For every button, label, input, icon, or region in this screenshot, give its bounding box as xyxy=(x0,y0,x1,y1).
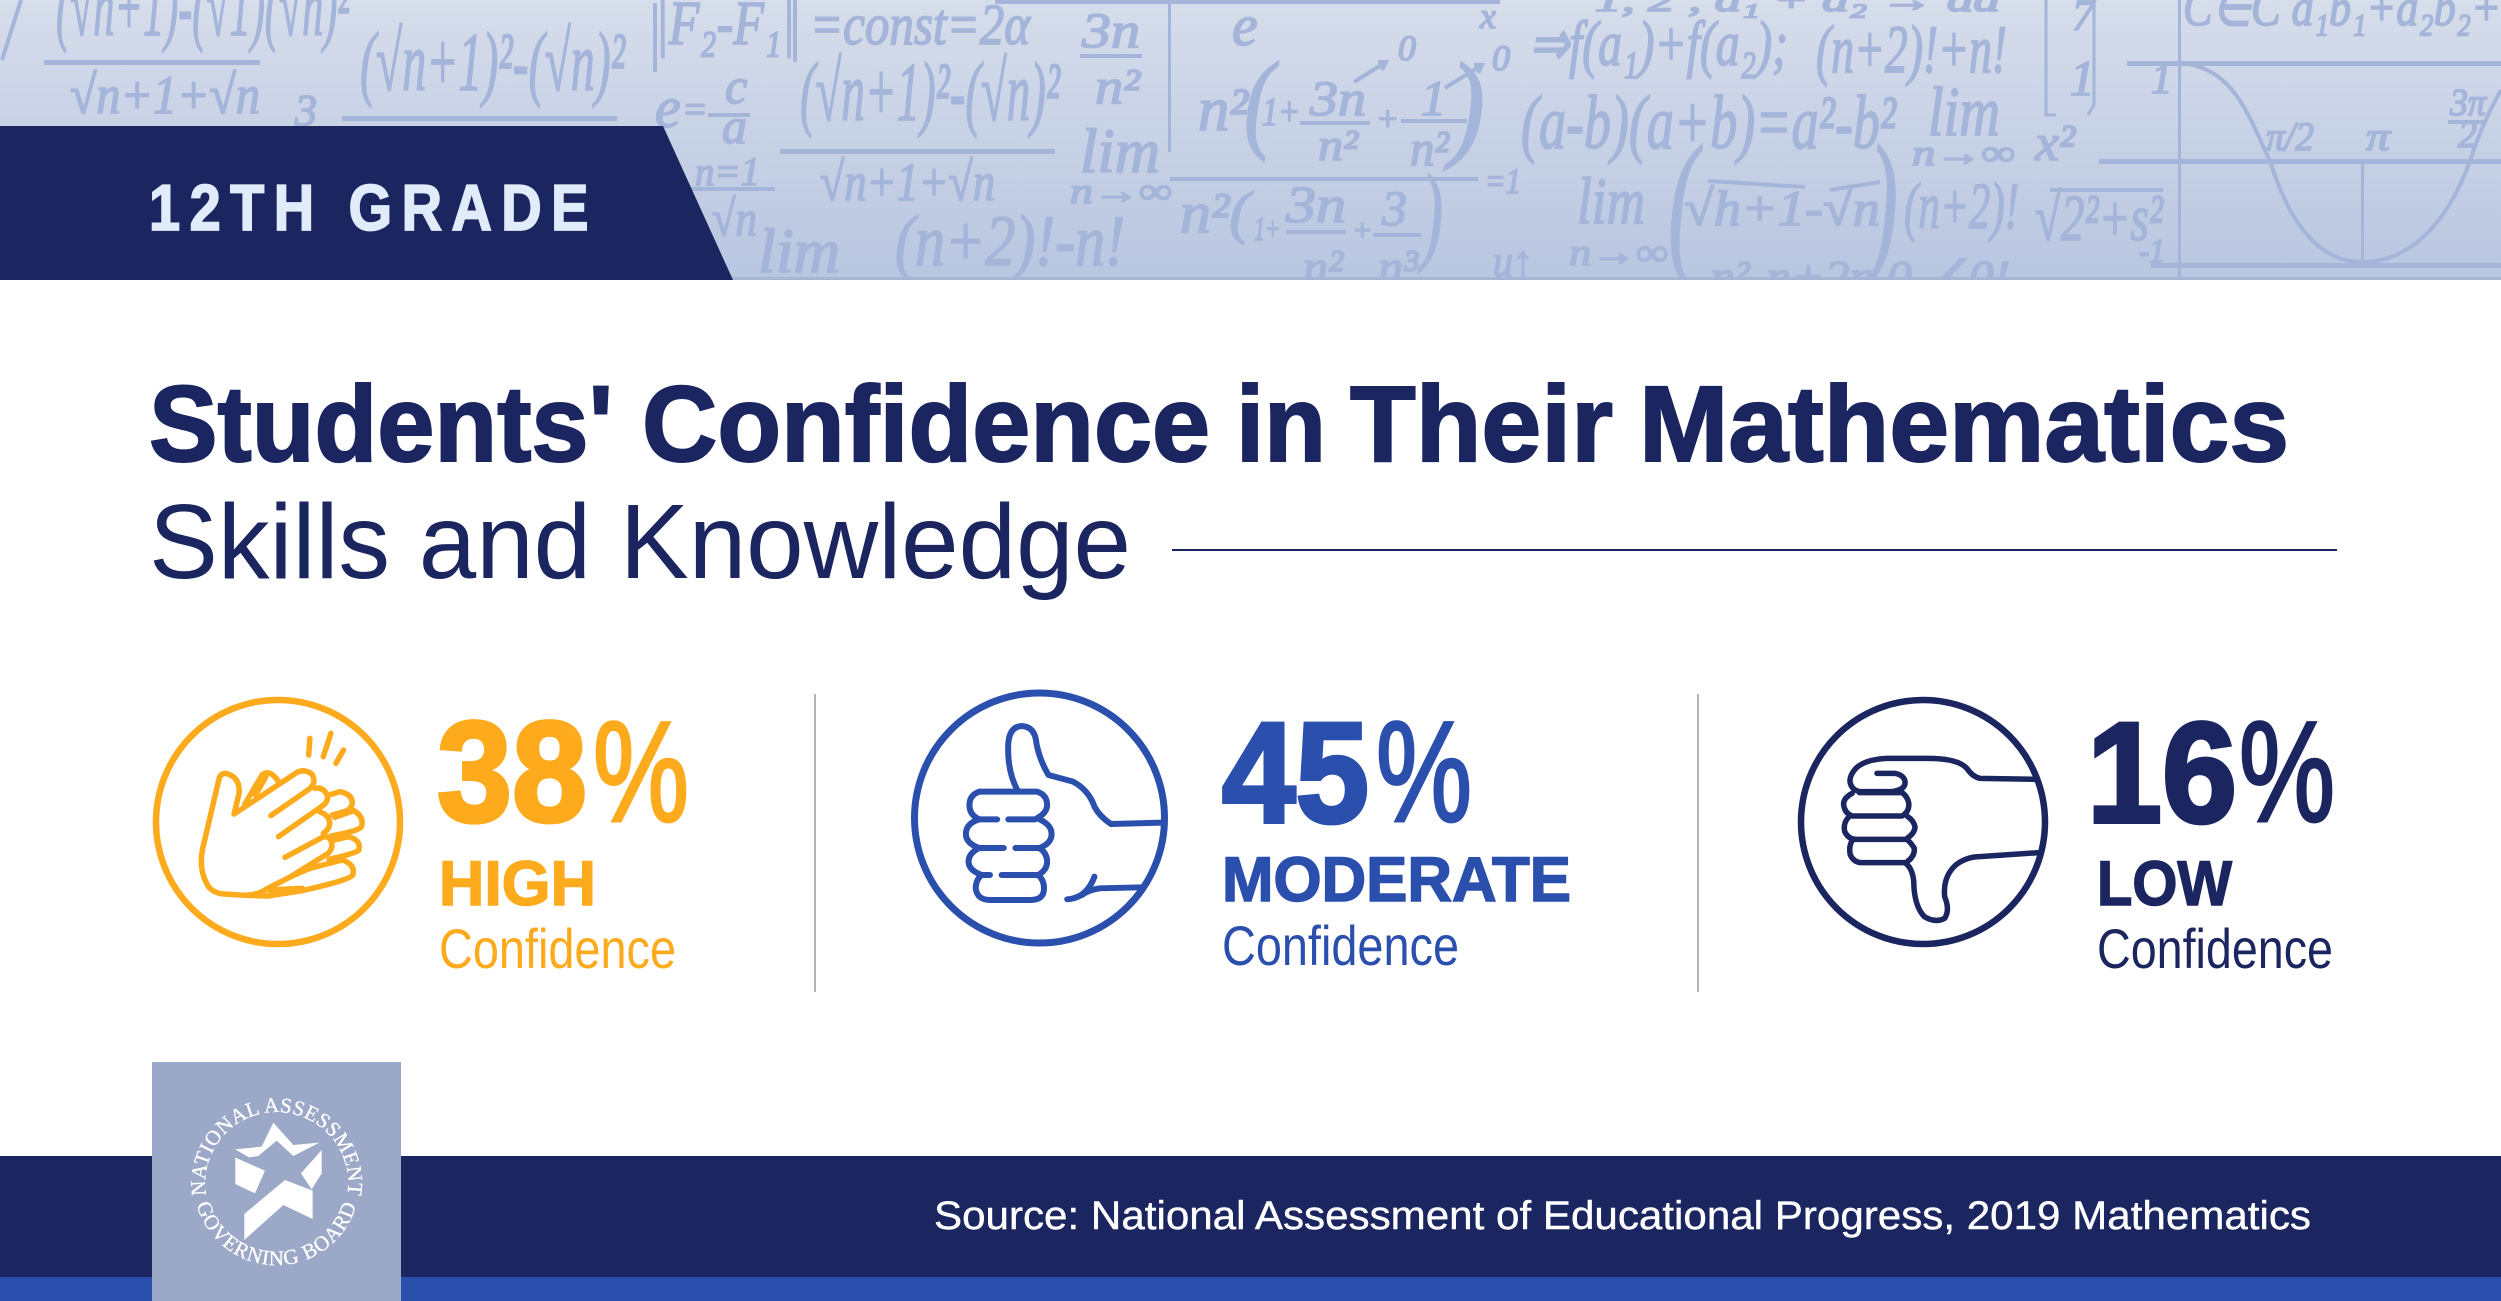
stat 45%: % xyxy=(1376,693,1472,852)
header math background: (n+2)! xyxy=(1904,170,2019,243)
header math background: 3 xyxy=(1381,180,1407,236)
stat 45%: 45 xyxy=(1222,694,1369,853)
header math background: n=1 xyxy=(695,149,760,194)
icon: star xyxy=(235,1123,322,1240)
header math background: n³ xyxy=(1378,239,1419,295)
header math background: (√n+1)²-(√n)² xyxy=(800,46,1061,139)
header math background: (n+2)!-n! xyxy=(895,201,1125,281)
header math background: 1 xyxy=(1421,70,1446,126)
stat 45% xyxy=(1222,693,1472,853)
header math background: + xyxy=(1352,214,1372,247)
header math background: √h+1-√n xyxy=(1684,180,1880,236)
header math background: ⇒f(a₁)+f(a₂); xyxy=(1529,8,1788,79)
stat 16% xyxy=(2087,693,2335,853)
title line bold: Mathematics xyxy=(1639,363,2289,484)
label: confidence: Confidence xyxy=(1222,914,1459,977)
logo text: GOVERNING BOARD xyxy=(198,1202,355,1266)
header math background: + xyxy=(1376,101,1399,138)
label: confidence: Confidence xyxy=(2097,917,2333,980)
stat 38%: % xyxy=(593,693,689,852)
header math background: π/2 xyxy=(2266,114,2314,159)
icon: thumbs up xyxy=(914,693,1164,943)
header math background: √2²+s² xyxy=(2035,182,2164,255)
header math background xyxy=(0,0,2501,302)
header math background: 3π xyxy=(2449,82,2487,124)
label: high: HIGH xyxy=(439,849,596,919)
header math background: (√n+1)²-(√n)² xyxy=(360,16,626,109)
header math background: n²( xyxy=(1180,180,1254,245)
banner label: 12TH GRADE xyxy=(149,171,588,244)
title line bold: Students' xyxy=(149,363,613,484)
title xyxy=(149,363,2337,601)
footer bar xyxy=(0,1156,2501,1301)
header math background: 3 xyxy=(294,86,317,135)
header math background: lim xyxy=(1577,165,1645,238)
subtitle: Skills and Knowledge xyxy=(149,483,1131,601)
header math background: n→∞ xyxy=(1070,171,1172,211)
header math background: 3n xyxy=(1081,2,1140,58)
stat 38% xyxy=(437,693,689,852)
title line bold: Confidence xyxy=(642,363,1210,484)
header math background: lim xyxy=(1928,74,2000,151)
header math background: n→∞ xyxy=(1912,133,2015,173)
panel: high confidence xyxy=(156,693,689,980)
header math background: lim xyxy=(758,218,840,286)
header math background: 1+ xyxy=(1262,89,1300,134)
header math background: 3n xyxy=(1309,70,1366,126)
stat 16%: % xyxy=(2239,693,2335,852)
header math background: 0 xyxy=(1492,38,1510,78)
label: moderate: MODERATE xyxy=(1222,845,1571,915)
header math background: lim xyxy=(1080,118,1160,186)
grade banner xyxy=(0,126,733,280)
header math background: 1 xyxy=(2151,57,2172,103)
title line bold: in xyxy=(1236,363,1326,484)
header math background: c xyxy=(725,58,747,114)
header math background: x² xyxy=(2034,115,2076,172)
header math background: ( xyxy=(1668,112,1703,290)
header math background: a xyxy=(722,98,747,154)
header math background: n² xyxy=(1318,121,1359,170)
logo text: NATIONAL ASSESSMENT xyxy=(191,1098,362,1196)
header math background: = xyxy=(682,89,708,131)
icon: thumbs down xyxy=(1801,700,2045,944)
title line bold xyxy=(149,363,2289,484)
logo text xyxy=(191,1098,362,1266)
header math background: 1+ xyxy=(1254,211,1280,248)
header math background: ) xyxy=(1417,152,1443,274)
header math background: ( xyxy=(1244,40,1279,162)
header math background: u↑ xyxy=(1493,237,1533,286)
header math background: 3n xyxy=(1285,177,1346,234)
header math background: ) xyxy=(1863,112,1898,290)
header math background: (a-b)(a+b)=a²-b² xyxy=(1521,81,1897,165)
header math background: -1 xyxy=(2139,233,2165,270)
header math background: 0 xyxy=(1398,28,1416,68)
header math background: ) xyxy=(1444,38,1485,171)
logo: National Assessment Governing Board xyxy=(152,1062,401,1301)
stat 38%: 38 xyxy=(437,693,587,852)
header math background: =1 xyxy=(1485,161,1521,201)
panel: moderate confidence xyxy=(914,693,1571,977)
header math background: 2 xyxy=(2458,114,2477,156)
header math background: 1 xyxy=(2070,50,2095,106)
header math background: (n+2)!+n! xyxy=(1816,11,2007,87)
label: low: LOW xyxy=(2097,849,2232,919)
label: confidence: Confidence xyxy=(439,917,676,980)
source note: Source: National Assessment of Educational Progress, 2019 Mathematics xyxy=(934,1194,2311,1238)
icon: clapping hands xyxy=(156,700,400,944)
divider xyxy=(814,694,816,992)
header math background: √n xyxy=(712,190,757,246)
header math background: e xyxy=(655,75,681,140)
stat 16%: 16 xyxy=(2087,694,2237,853)
header math background: π xyxy=(2366,114,2391,159)
header math background: n² xyxy=(1410,120,1450,176)
header math background: n² xyxy=(1303,239,1344,295)
header math background: n→∞ xyxy=(1569,232,1668,274)
header math background: √n+1+√n xyxy=(820,152,995,212)
panel: low confidence xyxy=(1801,693,2335,980)
title line bold: Their xyxy=(1350,363,1613,484)
header math background: n² xyxy=(1095,58,1141,114)
header math background: √n+1+√n xyxy=(70,65,260,125)
header math background: n²-n+2n 0 ∠0! xyxy=(1710,251,2010,302)
header math background: n² xyxy=(1198,76,1249,144)
